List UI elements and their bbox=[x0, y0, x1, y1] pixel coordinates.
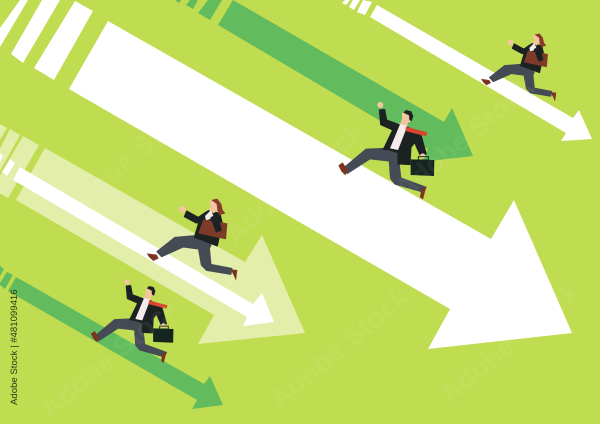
hair bbox=[147, 286, 155, 296]
jacket bbox=[184, 211, 222, 246]
arrow: top green falling arrow bbox=[175, 0, 473, 162]
figure: businesswoman on pale arrow bbox=[147, 199, 237, 281]
watermark text bbox=[34, 71, 585, 424]
watermark text: Adobe Stock bbox=[434, 276, 585, 410]
trousers bbox=[343, 148, 426, 192]
tie bbox=[148, 300, 167, 309]
shoes bbox=[338, 162, 426, 199]
shirt bbox=[529, 43, 537, 52]
arrow: white arrow on pale arrow bbox=[0, 153, 274, 326]
hair bbox=[535, 33, 546, 47]
stock id credit: Adobe Stock | #481099416 bbox=[9, 289, 20, 405]
briefcase bbox=[153, 326, 173, 343]
hair bbox=[403, 110, 413, 121]
trousers bbox=[157, 236, 232, 274]
head and hand bbox=[124, 279, 166, 328]
watermark text: Adobe Stock bbox=[264, 281, 415, 415]
jacket bbox=[126, 285, 167, 333]
figure: businessman on big arrow bbox=[338, 102, 434, 199]
figure: businesswoman on top right arrow bbox=[481, 33, 556, 102]
trousers bbox=[95, 319, 166, 357]
arrow: pale green falling arrow bbox=[0, 124, 305, 344]
trousers bbox=[490, 64, 551, 96]
skin bbox=[179, 201, 218, 213]
skin bbox=[508, 35, 540, 46]
shirt bbox=[389, 123, 408, 151]
head and hand bbox=[377, 102, 425, 159]
shoes bbox=[147, 253, 237, 281]
jacket bbox=[512, 43, 544, 73]
shoes bbox=[91, 331, 167, 363]
watermark text: Adobe Stock bbox=[54, 91, 205, 225]
watermark text: Adobe Stock bbox=[219, 116, 370, 250]
jacket bbox=[379, 109, 426, 165]
briefcase bbox=[411, 157, 434, 176]
arrow: top right white falling arrow bbox=[342, 0, 592, 141]
arrow: big white falling arrow bbox=[0, 0, 572, 349]
hair bbox=[211, 199, 225, 215]
watermark text: Adobe Stock bbox=[34, 291, 185, 424]
figure: businessman on bottom arrow bbox=[91, 279, 173, 363]
shirt bbox=[205, 210, 214, 221]
bag bbox=[524, 51, 548, 67]
shoes bbox=[481, 79, 556, 102]
arrow: bottom green falling arrow bbox=[0, 266, 223, 409]
watermark text: Adobe Stock bbox=[389, 71, 540, 205]
forearm bbox=[534, 46, 543, 62]
forearm bbox=[210, 214, 222, 233]
shirt bbox=[134, 297, 151, 321]
bag bbox=[198, 219, 227, 239]
tie bbox=[405, 127, 427, 136]
